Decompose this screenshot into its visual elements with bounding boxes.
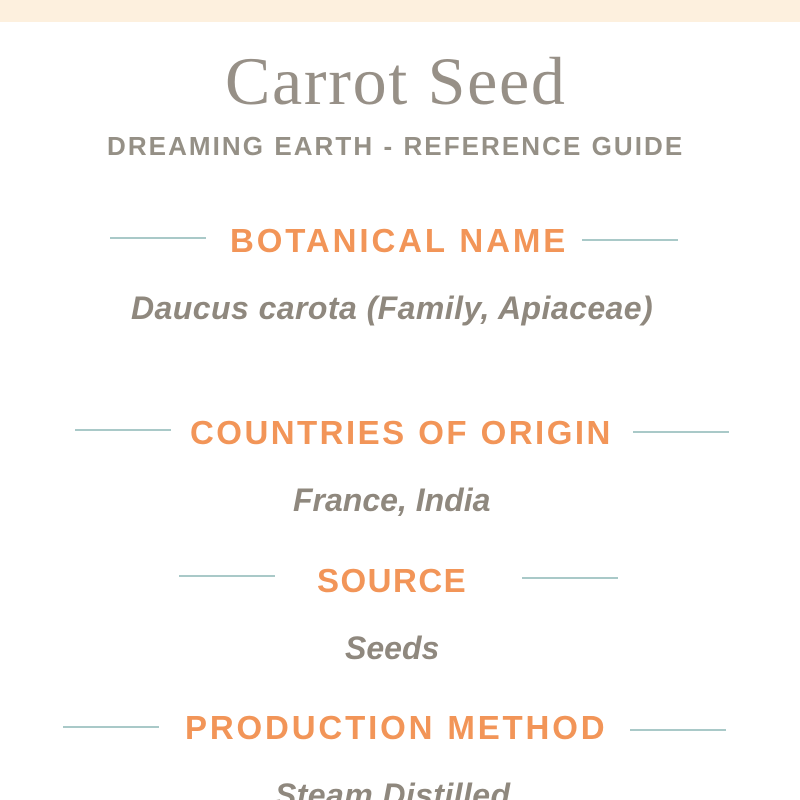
heading: production method: PRODUCTION METHOD bbox=[185, 709, 607, 746]
divider: production right bbox=[630, 729, 726, 731]
heading: source: SOURCE bbox=[317, 562, 467, 599]
text: source value: Seeds bbox=[345, 630, 439, 666]
heading: countries of origin: COUNTRIES OF ORIGIN bbox=[190, 414, 613, 451]
text: countries value: France, India bbox=[293, 482, 490, 518]
divider: botanical right bbox=[582, 239, 678, 241]
subtitle: DREAMING EARTH - REFERENCE GUIDE bbox=[107, 131, 684, 161]
title: Carrot Seed bbox=[225, 43, 567, 119]
divider: production left bbox=[63, 726, 159, 728]
divider: source left bbox=[179, 575, 275, 577]
divider: source right bbox=[522, 577, 618, 579]
divider: botanical left bbox=[110, 237, 206, 239]
divider: countries left bbox=[75, 429, 171, 431]
text: botanical name value: Daucus carota (Family, Apiaceae) bbox=[131, 290, 653, 326]
divider: countries right bbox=[633, 431, 729, 433]
top banner bbox=[0, 0, 800, 22]
heading: botanical name: BOTANICAL NAME bbox=[230, 222, 568, 259]
